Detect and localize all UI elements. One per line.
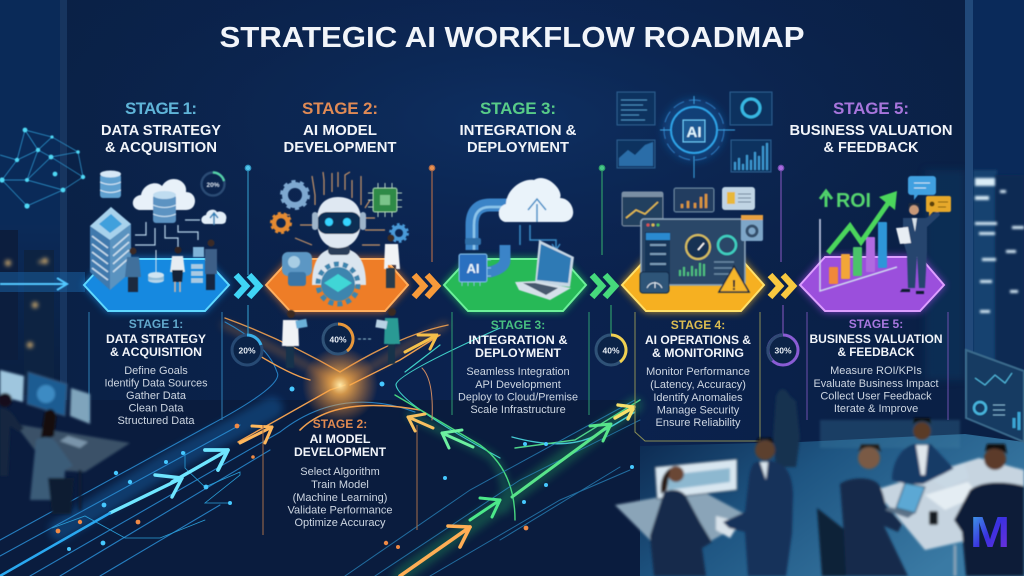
icon: stage 3 integration illustration	[459, 178, 574, 300]
arrow: yellow right	[615, 405, 634, 419]
database puck	[148, 250, 164, 283]
progress rings	[232, 324, 798, 365]
text block: stage 3 details	[458, 318, 578, 416]
text block: stage 5 details: Evaluate Business Impact	[814, 378, 938, 390]
ring: 40 percent yellow	[596, 335, 626, 365]
text block: stage 1 details: Gather Data	[126, 390, 187, 402]
pin: purple	[778, 165, 784, 335]
heading: stage 1: STAGE 1:	[125, 99, 197, 118]
text block: stage 5 details	[810, 317, 942, 415]
text block: stage 3 details: Deploy to Cloud/Premise	[458, 392, 578, 404]
progress ring: 20%	[206, 182, 220, 189]
ROI label: ROI	[836, 190, 871, 212]
title: STRATEGIC AI WORKFLOW ROADMAP	[220, 22, 804, 54]
robot body	[312, 248, 366, 285]
text block: stage 4 details: (Latency, Accuracy)	[650, 379, 746, 391]
main dashboard	[641, 219, 745, 285]
ring: 40 percent orange: 40%	[329, 334, 347, 344]
text block: stage 2 details: Train Model	[311, 479, 369, 491]
alert bubble	[722, 187, 755, 210]
cloud	[133, 179, 195, 223]
data panel top-right	[730, 92, 772, 125]
panel bars	[674, 188, 714, 212]
ring: 20 percent	[232, 335, 262, 365]
panel outline: stage 4	[635, 312, 760, 441]
warning triangle	[719, 266, 749, 294]
bars panel right	[731, 140, 771, 172]
chevrons	[236, 275, 793, 297]
heading: stage 3: STAGE 3:	[480, 99, 556, 118]
entry arrow	[0, 272, 85, 292]
icon: stage 5 ROI illustration	[820, 176, 951, 294]
laptop	[515, 240, 574, 300]
gear blue small	[390, 224, 408, 242]
chart panel left	[617, 140, 655, 168]
pin: green	[599, 165, 611, 335]
heading: stage 3	[460, 99, 577, 156]
stage 4 platform	[621, 258, 765, 312]
pin: cyan	[245, 165, 251, 335]
panel outline: stage 2 lower	[263, 425, 417, 535]
text block: stage 3 details: Seamless Integration	[466, 366, 570, 378]
gear blue large	[282, 182, 308, 208]
gear widget	[741, 215, 763, 241]
back window glow	[820, 420, 960, 448]
man back	[892, 418, 955, 484]
woman at desk	[650, 466, 712, 576]
heading: stage 3: INTEGRATION &	[460, 123, 577, 139]
heading: stage 2: STAGE 2:	[302, 99, 378, 118]
text block: stage 1 details: Structured Data	[117, 415, 195, 427]
text block: stage 1 details	[104, 317, 208, 427]
stage panels	[89, 312, 948, 535]
arrow: cyan lower	[110, 450, 228, 513]
text block: stage 1 details: Define Goals	[124, 365, 188, 377]
scientist lower left	[282, 310, 308, 368]
text block: stage 4 details: & MONITORING	[652, 346, 744, 360]
keyboard	[60, 436, 88, 448]
text block: stage 5 details: Measure ROI/KPIs	[830, 365, 922, 377]
text block: stage 4 details: Identify Anomalies	[653, 392, 743, 404]
upload cloud	[201, 210, 226, 225]
text block: stage 2 details: STAGE 2:	[313, 417, 367, 431]
arrow: green lower	[470, 498, 500, 520]
text block: stage 1 details: Identify Data Sources	[104, 378, 208, 390]
robot head	[312, 197, 366, 248]
scientist lower right	[375, 308, 400, 364]
panel outline: stage 3	[452, 312, 589, 415]
AI core	[660, 96, 735, 178]
documents	[925, 482, 979, 510]
heading: stage 2	[284, 99, 397, 156]
text block: stage 3 details: DEPLOYMENT	[475, 346, 562, 360]
machine arm	[282, 252, 312, 286]
monitor	[655, 459, 737, 499]
arrow: orange left	[240, 426, 272, 443]
text block: stage 5 details: Iterate & Improve	[834, 403, 918, 415]
table legs	[954, 545, 956, 576]
heading: stage 1	[101, 99, 221, 156]
stage 1 platform	[83, 258, 230, 312]
arrow: orange lower	[400, 526, 470, 576]
chair	[48, 478, 74, 514]
laptop back	[932, 463, 969, 488]
standing man	[723, 438, 793, 576]
text block: stage 2 details	[288, 417, 392, 529]
chip	[368, 183, 402, 217]
junction glow	[302, 347, 378, 423]
text block: stage 3 details: INTEGRATION &	[468, 333, 568, 347]
text block: stage 1 details: Clean Data	[128, 402, 184, 414]
heading: stage 5	[790, 99, 952, 156]
chevron: green	[592, 275, 615, 297]
text block: stage 4 details: AI OPERATIONS &	[645, 333, 751, 347]
person one	[0, 393, 24, 476]
heading: stage 5: BUSINESS VALUATION	[790, 123, 952, 139]
data panel top-left	[617, 92, 655, 125]
chat bubble blue	[908, 176, 936, 200]
glow bands	[60, 325, 635, 576]
text block: stage 2 details: DEVELOPMENT	[294, 445, 387, 459]
growth arrow	[828, 191, 897, 253]
text block: stage 5 details: BUSINESS VALUATION	[810, 332, 942, 346]
arrow: orange upper right	[405, 335, 437, 352]
stage 2 platform	[265, 258, 409, 312]
text block: stage 1 details: DATA STRATEGY	[106, 332, 206, 346]
text block: stage 2 details: AI MODEL	[310, 432, 370, 446]
ring: 30 percent: 30%	[774, 346, 792, 356]
ROI up arrow	[820, 191, 832, 207]
stage 5 platform	[799, 256, 945, 312]
text block: stage 5 details: STAGE 5:	[849, 317, 903, 331]
text block: stage 2 details: Select Algorithm	[300, 466, 380, 478]
AI chip: AI	[466, 261, 480, 276]
text block: stage 2 details: Validate Performance	[288, 504, 392, 516]
AI core: AI	[686, 124, 702, 141]
logo: M	[970, 508, 1010, 557]
pin: orange	[429, 165, 435, 262]
wall screen	[966, 350, 1024, 442]
icon: stage 4 AI dashboards	[617, 92, 772, 294]
left city view with window frame	[0, 0, 67, 400]
text block: stage 1 details: & ACQUISITION	[110, 345, 202, 359]
text block: stage 5 details: Collect User Feedback	[820, 390, 932, 402]
chevron: cyan	[236, 275, 259, 297]
text block: stage 3 details: API Development	[475, 379, 561, 391]
arrow: green up-left	[442, 430, 473, 448]
panel outline: stage 1	[89, 312, 222, 420]
text block: stage 2 details: Optimize Accuracy	[294, 517, 386, 529]
icon: stage 2 AI robot illustration	[272, 172, 408, 368]
scientist top	[384, 234, 400, 288]
ring: 30 percent	[768, 335, 798, 365]
heading: stage 2: DEVELOPMENT	[284, 140, 397, 156]
heading: stage 2: AI MODEL	[303, 123, 377, 139]
stage headings	[101, 99, 952, 156]
panel outline: stage 5	[807, 312, 948, 420]
text block: stage 2 details: (Machine Learning)	[293, 492, 387, 504]
man right	[954, 444, 1024, 576]
coffee cup	[929, 511, 938, 525]
man left	[840, 444, 908, 576]
heading: stage 5: & FEEDBACK	[824, 140, 919, 156]
scene: office floor	[640, 434, 1024, 576]
connector pins	[245, 165, 784, 335]
network graphic	[0, 128, 85, 209]
text block: stage 1 details: STAGE 1:	[129, 317, 183, 331]
wires	[280, 172, 385, 245]
pipe	[465, 205, 510, 272]
small callout dots	[358, 338, 372, 340]
businessman	[896, 203, 940, 294]
chevron: yellow	[770, 275, 793, 297]
stage 3 platform	[443, 258, 587, 312]
warning triangle: !	[732, 277, 736, 294]
text block: stage 3 details: STAGE 3:	[491, 318, 545, 332]
database stack	[100, 170, 121, 198]
person two	[30, 409, 73, 500]
gear center	[318, 264, 358, 304]
text block: stage 5 details: & FEEDBACK	[838, 345, 915, 359]
bars	[829, 222, 887, 284]
text block: stage 4 details: Monitor Performance	[646, 366, 750, 378]
heading: stage 3: DEPLOYMENT	[467, 140, 569, 156]
monitors	[0, 370, 90, 424]
ring: 40 percent yellow: 40%	[602, 346, 620, 356]
road network	[0, 318, 640, 576]
heading: stage 1: DATA STRATEGY	[101, 123, 221, 139]
cloud arrows	[520, 199, 560, 250]
right city view with window frame	[925, 0, 1024, 400]
chat bubble yellow	[926, 196, 951, 216]
cloud	[499, 178, 573, 222]
desk left	[615, 490, 752, 547]
panel line chart	[622, 192, 663, 226]
ring: 20 percent: 20%	[238, 346, 256, 356]
icon: stage 1 data illustration	[90, 170, 226, 292]
text block: stage 3 details: Scale Infrastructure	[470, 404, 566, 416]
circuit traces	[52, 452, 240, 538]
ring: 40 percent orange	[323, 324, 353, 354]
arrow: green right	[512, 424, 611, 497]
chevron: orange	[414, 275, 437, 297]
heading: stage 1: & ACQUISITION	[105, 140, 217, 156]
gauge tile	[640, 272, 669, 293]
robot neck	[328, 245, 350, 255]
gear orange	[272, 214, 290, 232]
road edges	[0, 322, 415, 576]
circuit wires	[135, 220, 200, 250]
text block: stage 4 details	[645, 318, 751, 429]
text block: stage 4 details: Manage Security	[657, 404, 740, 416]
scene: analysts at monitors	[0, 370, 130, 514]
paper and laptop	[716, 516, 740, 538]
chair	[817, 508, 850, 576]
axis	[820, 219, 897, 291]
server tower	[90, 207, 131, 290]
text block: stage 4 details: Ensure Reliability	[656, 417, 741, 429]
reflected figure	[773, 389, 800, 467]
text block: stage 4 details: STAGE 4:	[671, 318, 725, 332]
laptop on table	[885, 483, 925, 518]
arrow: yellow up-left	[408, 414, 433, 431]
people	[125, 240, 217, 292]
meeting table	[875, 458, 1024, 550]
heading: stage 5: STAGE 5:	[833, 99, 909, 118]
desk	[15, 424, 130, 472]
scene: office team	[615, 389, 1024, 576]
